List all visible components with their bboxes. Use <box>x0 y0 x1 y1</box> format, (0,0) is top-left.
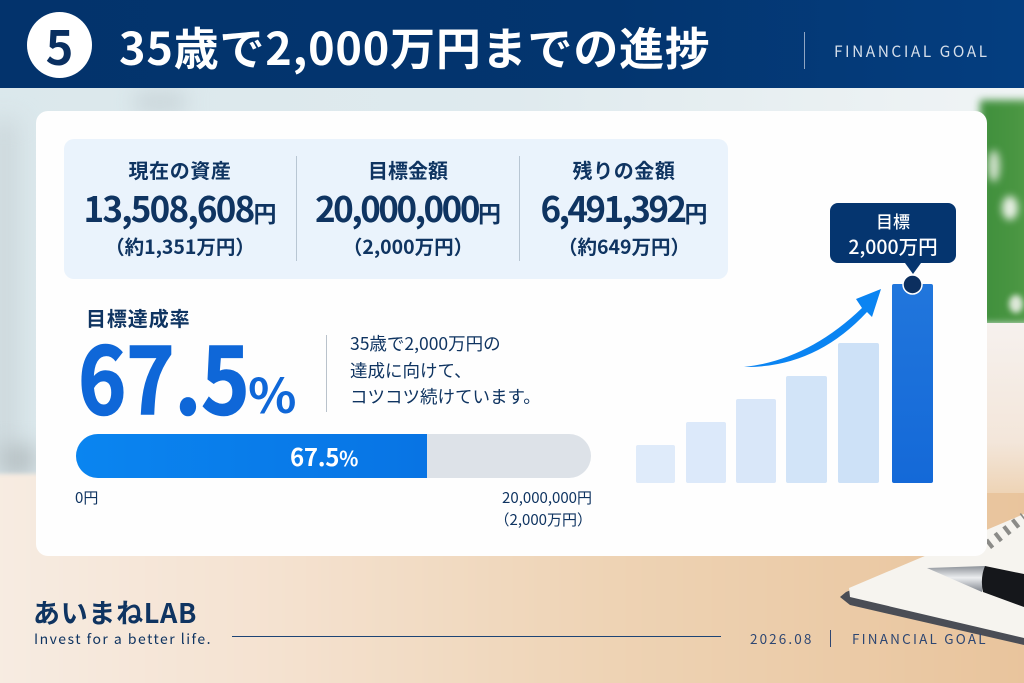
target marker <box>903 275 922 294</box>
divider <box>296 156 297 261</box>
bar 2 <box>686 422 726 483</box>
progress fill <box>76 434 427 478</box>
brand name: あいまねLAB <box>33 592 197 631</box>
summary: target amount: （2,000万円） <box>343 231 473 260</box>
summary: target amount: 20,000,000円 <box>315 182 501 233</box>
message: 達成に向けて、 <box>350 358 472 382</box>
scale end label: （2,000万円） <box>495 509 592 530</box>
divider <box>519 156 520 261</box>
panel: summary figures <box>64 139 728 279</box>
footer rule <box>232 636 721 637</box>
title: 35歳で2,000万円までの進捗 <box>119 13 711 78</box>
header divider <box>804 32 805 69</box>
callout amount: 2,000万円 <box>848 231 938 260</box>
footer date: 2026.08 <box>750 628 813 648</box>
message: コツコツ続けています。 <box>350 384 541 409</box>
summary: target amount: 目標金額 <box>368 155 448 184</box>
progress bar <box>76 434 591 478</box>
footer label: FINANCIAL GOAL <box>852 628 988 648</box>
summary: remaining amount <box>541 155 707 260</box>
achievement rate <box>78 308 297 441</box>
number badge: 5 <box>46 10 73 79</box>
bar 4 <box>786 376 827 483</box>
target callout <box>830 203 956 263</box>
bar chart <box>636 276 933 483</box>
number badge <box>27 12 92 78</box>
footer divider <box>830 630 831 647</box>
callout pointer <box>905 263 921 274</box>
vertical divider <box>326 335 327 412</box>
bar 5 <box>838 343 879 483</box>
header label: FINANCIAL GOAL <box>834 40 990 62</box>
summary: current assets: 13,508,608円 <box>84 182 276 233</box>
growth arrow <box>744 289 881 367</box>
summary: remaining amount: （約649万円） <box>558 231 690 260</box>
bar 6: target <box>892 284 933 483</box>
bar 1 <box>636 445 675 483</box>
rate number: 67.5 <box>78 308 250 441</box>
achievement heading: 目標達成率 <box>86 303 190 332</box>
message: 35歳で2,000万円の <box>350 331 501 356</box>
summary: current assets <box>84 155 276 260</box>
summary: remaining amount: 6,491,392円 <box>541 182 707 233</box>
percent sign: % <box>248 357 297 427</box>
notebook and pen <box>840 513 1024 645</box>
header band <box>0 0 1024 88</box>
main white panel <box>36 111 987 556</box>
summary: remaining amount: 残りの金額 <box>572 155 676 184</box>
message <box>350 331 541 409</box>
scale start label: 0円 <box>75 487 98 508</box>
bar 3 <box>736 399 776 483</box>
progress label: 67.5% <box>290 438 358 473</box>
callout heading: 目標 <box>876 208 910 233</box>
summary: target amount <box>315 155 501 260</box>
brand tagline: Invest for a better life. <box>34 629 212 649</box>
scale end label: 20,000,000円 <box>502 487 592 508</box>
scale end label <box>495 487 592 530</box>
summary: current assets: （約1,351万円） <box>105 231 255 260</box>
summary: current assets: 現在の資産 <box>128 155 232 184</box>
